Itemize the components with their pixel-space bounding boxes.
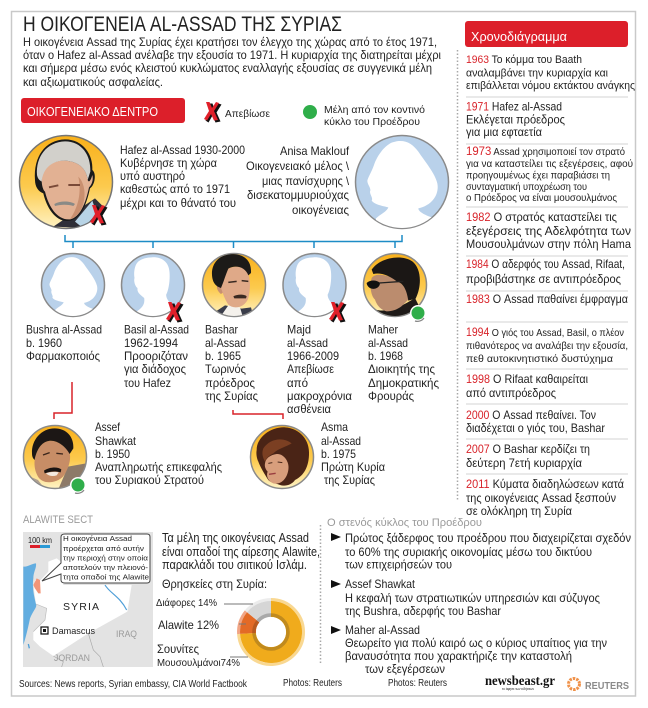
tree connectors xyxy=(65,235,402,248)
event 1994: πεθ αυτοκινητιστικό δυστύχημα xyxy=(466,353,613,365)
event 1984: προβιβάστηκε σε αντιπρόεδρος xyxy=(466,272,621,286)
text: Anisa Maklouf: Οικογενειακό μέλος \ xyxy=(246,159,350,173)
logo: newsbeast: το άφησε των ειδήσεων xyxy=(502,686,534,691)
text: Majd al-Assad: ασθένεια xyxy=(287,402,331,416)
chart label: Sunni: Μουσουλμάνοι74% xyxy=(157,657,240,669)
text: Assef Shawkat: Assef xyxy=(95,420,121,434)
event 1973: για να καταστείλει τις εξεγέρσεις, αφού xyxy=(466,158,633,170)
text: Bashar al-Assad: b. 1965 xyxy=(205,349,241,363)
event 1963: 1963 Το κόμμα του Baath xyxy=(466,54,582,66)
event 1998 xyxy=(466,372,588,400)
text: Alawite description: παρακλάδι του σιιτικού Ισλάμ. xyxy=(162,558,307,572)
bullet: cousin xyxy=(331,531,631,572)
text: Majd al-Assad: Majd xyxy=(287,322,311,336)
intro text: Η οικογένεια Assad της Συρίας έχει κρατήσει τον έλεγχο της χώρας από το έτος 1971, xyxy=(23,35,437,49)
spouse connectors xyxy=(54,382,283,419)
event 1994: 1994 Ο γιός του Assad, Basil, ο πλέον xyxy=(466,325,624,339)
scale bar: 100 km xyxy=(28,536,52,545)
heading: timeline xyxy=(465,21,628,47)
text: Hafez al-Assad: υπό αυστηρό xyxy=(120,169,185,183)
portrait: Bashar al-Assad xyxy=(202,254,266,320)
chart label: Sunni: Σουνίτες xyxy=(157,642,199,656)
map labels: Damascus xyxy=(52,626,95,637)
legend: inner circle: κύκλο του Προέδρου xyxy=(324,116,420,128)
intro text: και αξιωματικούς ασφαλείας. xyxy=(23,75,163,89)
callout: τητα οπαδοί της Alawite xyxy=(63,572,149,582)
bullet: cousin: το 60% της συριακής οικονομίας μέσω του δικτύου xyxy=(345,545,592,559)
event 1971: για μια εφταετία xyxy=(466,125,542,139)
legend: inner circle xyxy=(303,104,425,128)
event 2000: διαδέχεται ο γιός του, Bashar xyxy=(466,421,605,435)
portrait: Hafez al-Assad xyxy=(20,136,112,228)
event 2000: 2000 Ο Assad πεθαίνει. Τον xyxy=(466,408,596,422)
event 1994: πιθανότερος να αναλάβει την εξουσία, xyxy=(466,340,628,352)
event 1984 xyxy=(466,257,625,286)
event 1971 xyxy=(466,100,565,139)
event 1982 xyxy=(466,210,631,251)
donut chart: religions in Syria xyxy=(239,600,304,664)
callout: αποτελούν την πλειονό- xyxy=(63,563,149,572)
text: Bashar al-Assad: Bashar xyxy=(205,322,238,336)
text: Maher al-Assad: Διοικητής της xyxy=(368,362,435,376)
text: Assef Shawkat: b. 1950 xyxy=(95,447,130,461)
footer: photo credit 1: Photos: Reuters xyxy=(283,678,342,689)
text: Bushra al-Assad: Φαρμακοποιός xyxy=(26,349,100,363)
portrait: Asma al-Assad xyxy=(250,426,314,488)
text: Majd al-Assad xyxy=(287,322,352,416)
map of Syria xyxy=(23,532,153,667)
text: Asma al-Assad: Asma xyxy=(321,420,348,434)
text: Hafez al-Assad: μέχρι και το θάνατό του xyxy=(120,196,236,210)
text: Assef Shawkat: Αναπληρωτής επικεφαλής xyxy=(95,460,222,474)
text: Maher al-Assad: al-Assad xyxy=(368,336,408,350)
text: Basil al-Assad: του Hafez xyxy=(124,376,171,390)
bullet: Maher al-Assad: βαναυσότητα που χαρακτήριζε την καταστολή xyxy=(345,649,572,663)
text: Bashar al-Assad: πρόεδρος xyxy=(205,376,255,390)
legend: inner circle: Μέλη από τον κοντινό xyxy=(324,104,425,116)
text: Maher al-Assad xyxy=(368,322,439,403)
text: Anisa Maklouf: οικογένειας xyxy=(292,203,349,217)
event 1963: αναλαμβάνει την κυριαρχία και xyxy=(466,68,609,80)
text: Asma al-Assad: b. 1975 xyxy=(321,447,356,461)
bullet: Assef Shawkat: της Bushra, αδερφής του Bashar xyxy=(345,604,501,618)
bullet: Assef Shawkat xyxy=(331,577,600,618)
donut segment: Alawite 12% xyxy=(239,611,259,634)
event 1984: 1984 Ο αδερφός του Assad, Rifaat, xyxy=(466,257,625,271)
text: Asma al-Assad: Πρώτη Κυρία xyxy=(321,460,385,474)
text: Hafez al-Assad: Hafez al-Assad 1930-2000 xyxy=(120,143,245,157)
text: Asma al-Assad: της Συρίας xyxy=(324,473,375,487)
portrait: Majd al-Assad silhouette xyxy=(283,254,346,322)
text: Asma al-Assad: al-Assad xyxy=(321,434,361,448)
legend: deceased: Απεβίωσε xyxy=(225,108,271,120)
portrait: Maher al-Assad xyxy=(364,254,427,321)
text: Basil al-Assad: για διάδοχος xyxy=(124,362,186,376)
event 1983: 1983 Ο Assad παθαίνει έμφραγμα xyxy=(466,292,628,306)
event 1973: προηγουμένως έχει παραβιάσει τη xyxy=(466,170,610,182)
text: Anisa Maklouf: Anisa Maklouf xyxy=(280,144,350,158)
text: Bashar al-Assad xyxy=(205,322,258,403)
chart label: other: Διάφορες 14% xyxy=(156,597,217,609)
event 1971: 1971 Hafez al-Assad xyxy=(466,100,562,114)
text: Maher al-Assad: Δημοκρατικής xyxy=(368,376,439,390)
event 2011: 2011 Κύματα διαδηλώσεων κατά xyxy=(466,477,624,491)
intro text: όταν ο Hafez al-Assad ανέλαβε την εξουσία το 1971. Η κυριαρχία της διατηρείται μέχρι xyxy=(23,48,441,62)
text: Asma al-Assad xyxy=(321,420,385,487)
heading: Alawite sect: ALAWITE SECT xyxy=(23,514,93,526)
bullet: Maher al-Assad: των εξεγέρσεων xyxy=(365,662,445,676)
event 1994 xyxy=(466,325,628,365)
donut segment: other 14% xyxy=(246,600,271,622)
event 2007: δεύτερη 7ετή κυριαρχία xyxy=(466,456,582,470)
event 1982: 1982 Ο στρατός καταστείλει τις xyxy=(466,210,617,224)
text: Assef Shawkat: Shawkat xyxy=(95,434,137,448)
bullet: Assef Shawkat: Η κεφαλή των στρατιωτικών υπηρεσιών και σύζυγος xyxy=(345,591,600,605)
bullet: Maher al-Assad: Maher al-Assad xyxy=(345,623,420,637)
event 1973: ο Πρόεδρος να είναι μουσουλμάνος xyxy=(466,192,617,204)
legend: deceased xyxy=(204,102,271,122)
text: Basil al-Assad: Προοριζόταν xyxy=(124,349,188,363)
text: Majd al-Assad: μακροχρόνια xyxy=(287,389,352,403)
map labels: JORDAN xyxy=(54,653,90,663)
event 1963: επιβάλλεται νόμου εκτάκτου ανάγκης xyxy=(466,80,635,92)
event 2000 xyxy=(466,408,605,435)
text: Maher al-Assad: Φρουράς xyxy=(368,389,414,403)
heading: timeline: Χρονοδιάγραμμα xyxy=(471,29,567,44)
text: Anisa Maklouf: δισεκατομμυριούχας xyxy=(247,188,349,202)
panel: president's inner circle xyxy=(327,517,631,676)
logo: Reuters xyxy=(568,678,629,692)
event 1963 xyxy=(466,54,635,92)
event 1973: συνταγματική υποχρέωση του xyxy=(466,181,587,193)
text: Alawite description: είναι οπαδοί της αίρεσης Alawite, xyxy=(162,545,320,559)
callout xyxy=(42,534,150,583)
callout: την περιοχή στην οποία xyxy=(63,554,149,562)
bullet: cousin: των επιχειρήσεών του xyxy=(345,558,452,572)
logo: Reuters: REUTERS xyxy=(585,680,629,692)
portrait: Bushra al-Assad silhouette xyxy=(42,254,104,320)
text: Assef Shawkat: του Συριακού Στρατού xyxy=(95,473,204,487)
footer: sources: Sources: News reports, Syrian embassy, CIA World Factbook xyxy=(19,679,248,690)
event 1998: από αντιπρόεδρος xyxy=(466,386,556,400)
text: Majd al-Assad: 1966-2009 xyxy=(287,349,339,363)
event 1971: Εκλέγεται πρόεδρος xyxy=(466,112,565,126)
callout: προέρχεται από αυτήν xyxy=(63,544,144,553)
footer: photo credit 2: Photos: Reuters xyxy=(388,678,447,689)
bullet: Assef Shawkat: Assef Shawkat xyxy=(345,577,416,591)
heading: family tree: ΟΙΚΟΓΕΝΕΙΑΚΟ ΔΕΝΤΡΟ xyxy=(27,105,158,119)
event 1982: εξεγέρσεις της Αδελφότητα των xyxy=(466,224,631,238)
chart label: Alawite: Alawite 12% xyxy=(158,618,219,632)
text: Maher al-Assad: b. 1968 xyxy=(368,349,403,363)
chart label: other xyxy=(156,597,253,609)
text: Majd al-Assad: Απεβίωσε xyxy=(287,362,335,376)
text: Basil al-Assad: 1962-1994 xyxy=(124,336,178,350)
heading: family tree xyxy=(21,98,185,123)
portrait: Assef Shawkat xyxy=(24,426,86,493)
intro text: και σήμερα μέσω ενός κλειστού κυκλώματος εναλλαγής εξουσίας σε συγγενικά μέλη xyxy=(23,61,432,75)
event 2011: της οικογένειας Assad ξεσπούν xyxy=(466,491,616,505)
text: Bushra al-Assad xyxy=(26,322,102,363)
text: Bashar al-Assad: της Συρίας xyxy=(205,389,258,403)
event 1973: 1973 Assad χρησιμοποιεί τον στρατό xyxy=(466,144,625,158)
event 1998: 1998 Ο Rifaat καθαιρείται xyxy=(466,372,588,386)
text: Hafez al-Assad: Κυβέρνησε τη χώρα xyxy=(120,156,217,170)
event 2011 xyxy=(466,477,624,518)
bullet: cousin: Πρώτος ξάδερφος του προέδρου που διαχειρίζεται σχεδόν xyxy=(345,531,631,545)
event 2011: σε ολόκληρη τη Συρία xyxy=(466,504,572,518)
text: Basil al-Assad xyxy=(124,322,189,390)
event 2007: 2007 Ο Bashar κερδίζει τη xyxy=(466,442,590,456)
bullet: Maher al-Assad xyxy=(331,623,607,676)
event 1982: Μουσουλμάνων στην πόλη Hama xyxy=(466,237,631,251)
portrait: Basil al-Assad silhouette xyxy=(122,254,184,322)
map labels: IRAQ xyxy=(116,629,137,639)
text: Bashar al-Assad: al-Assad xyxy=(205,336,246,350)
text: Maher al-Assad: Maher xyxy=(368,322,398,336)
map labels xyxy=(41,601,137,663)
text: Hafez al-Assad xyxy=(120,143,245,210)
text: Bushra al-Assad: Bushra al-Assad xyxy=(26,322,102,336)
logo: newsbeast: newsbeast.gr xyxy=(485,674,555,689)
event 2007 xyxy=(466,442,590,470)
event 1973 xyxy=(466,144,633,204)
text: Hafez al-Assad: καθεστώς από το 1971 xyxy=(120,182,230,196)
chart label: Sunni xyxy=(157,642,248,669)
intro text xyxy=(23,35,441,89)
donut segment: Sunni 74% xyxy=(239,600,304,664)
panel: timeline xyxy=(465,21,635,518)
text: Basil al-Assad: Basil al-Assad xyxy=(124,322,189,336)
text: Bashar al-Assad: Τωρινός xyxy=(205,362,246,376)
text: Majd al-Assad: al-Assad xyxy=(287,336,328,350)
text: Assef Shawkat xyxy=(95,420,222,487)
callout: Η οικογένεια Assad xyxy=(63,534,132,543)
bullet: Maher al-Assad: Θεωρείτο για πολύ καιρό ως ο κύριος υπαίτιος για την xyxy=(345,636,607,650)
map labels: SYRIA xyxy=(63,601,99,613)
portrait: Anisa Maklouf silhouette xyxy=(356,136,448,233)
text: Majd al-Assad: από xyxy=(287,376,308,390)
text: Bushra al-Assad: b. 1960 xyxy=(26,336,62,350)
text: Alawite description xyxy=(162,531,320,572)
title: Η ΟΙΚΟΓΕΝΕΙΑ AL-ASSAD ΤΗΣ ΣΥΡΙΑΣ xyxy=(23,13,342,36)
text: Alawite description: Τα μέλη της οικογένειας Assad xyxy=(162,531,309,545)
heading: inner circle: Ο στενός κύκλος του Προέδρου xyxy=(327,517,482,529)
heading: religions: Θρησκείες στη Συρία: xyxy=(162,577,267,591)
text: Anisa Maklouf xyxy=(246,144,350,217)
text: Anisa Maklouf: μιας πανίσχυρης \ xyxy=(262,174,350,188)
